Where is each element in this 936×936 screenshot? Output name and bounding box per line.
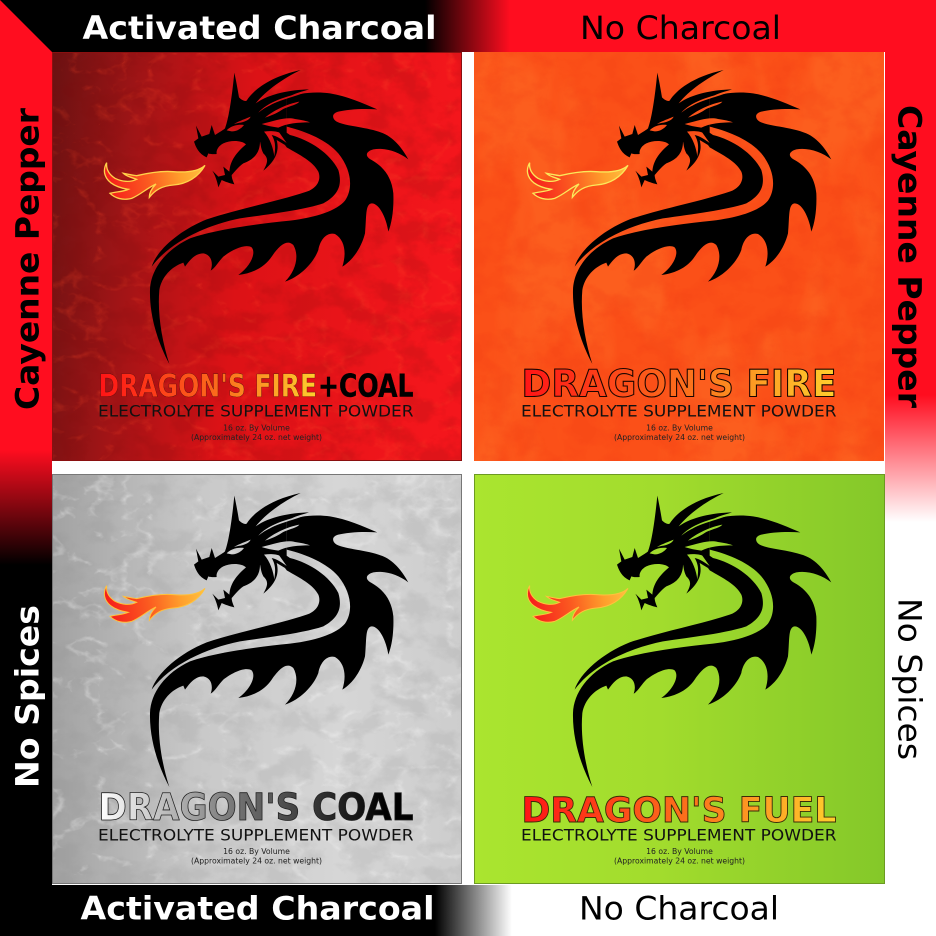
label: Cayenne Pepper left: Cayenne Pepper — [8, 108, 46, 410]
volume note: 16 oz. By Volume — [223, 424, 290, 432]
label: Activated Charcoal top: Activated Charcoal — [82, 9, 436, 47]
volume note — [191, 424, 322, 442]
panel: Dragon's Fire — [474, 52, 884, 461]
label: No Charcoal top: No Charcoal — [580, 9, 781, 47]
band: bottom footer — [0, 885, 885, 936]
volume note: 16 oz. By Volume — [223, 847, 290, 856]
product name: DRAGON'S FIRE — [98, 368, 317, 404]
label: Activated Charcoal bottom: Activated Charcoal — [80, 890, 434, 928]
product name: DRAGON'S FUEL — [522, 791, 836, 831]
subtitle: ELECTROLYTE SUPPLEMENT POWDER — [98, 826, 414, 844]
volume note: (Approximately 24 oz. net weight) — [614, 856, 745, 866]
volume note — [191, 847, 322, 866]
volume note: (Approximately 24 oz. net weight) — [191, 433, 322, 442]
subtitle: ELECTROLYTE SUPPLEMENT POWDER — [521, 826, 836, 844]
icon: dragon silhouette — [573, 493, 831, 787]
band: top header — [0, 0, 936, 52]
product name: DRAGON'S FIRE — [522, 362, 836, 406]
volume note — [614, 847, 745, 866]
icon: dragon silhouette — [573, 70, 831, 364]
icon: flame breath — [527, 586, 628, 622]
volume note: 16 oz. By Volume — [646, 847, 713, 856]
label: No Charcoal bottom: No Charcoal — [579, 890, 779, 928]
product name: +COAL — [318, 368, 414, 404]
panel: Dragon's Fuel — [474, 474, 885, 884]
panel: Dragon's Coal — [52, 474, 462, 884]
panel: Dragon's Fire+Coal — [52, 52, 462, 461]
icon: dragon silhouette — [150, 493, 408, 787]
label: Cayenne Pepper right: Cayenne Pepper — [890, 105, 928, 408]
volume note — [614, 424, 745, 442]
volume note: (Approximately 24 oz. net weight) — [191, 856, 322, 866]
subtitle: ELECTROLYTE SUPPLEMENT POWDER — [98, 402, 414, 420]
icon: flame breath — [104, 586, 205, 622]
product name: DRAGON'S COAL — [98, 786, 414, 829]
label: No Spices left: No Spices — [8, 605, 46, 788]
band: left side — [0, 0, 52, 936]
subtitle: ELECTROLYTE SUPPLEMENT POWDER — [521, 402, 836, 420]
icon: flame breath — [104, 163, 205, 199]
band: right side — [885, 0, 936, 936]
label: No Spices right: No Spices — [890, 598, 928, 760]
volume note: (Approximately 24 oz. net weight) — [614, 433, 745, 442]
volume note: 16 oz. By Volume — [646, 424, 713, 432]
icon: flame breath — [527, 163, 628, 199]
icon: dragon silhouette — [150, 70, 408, 364]
